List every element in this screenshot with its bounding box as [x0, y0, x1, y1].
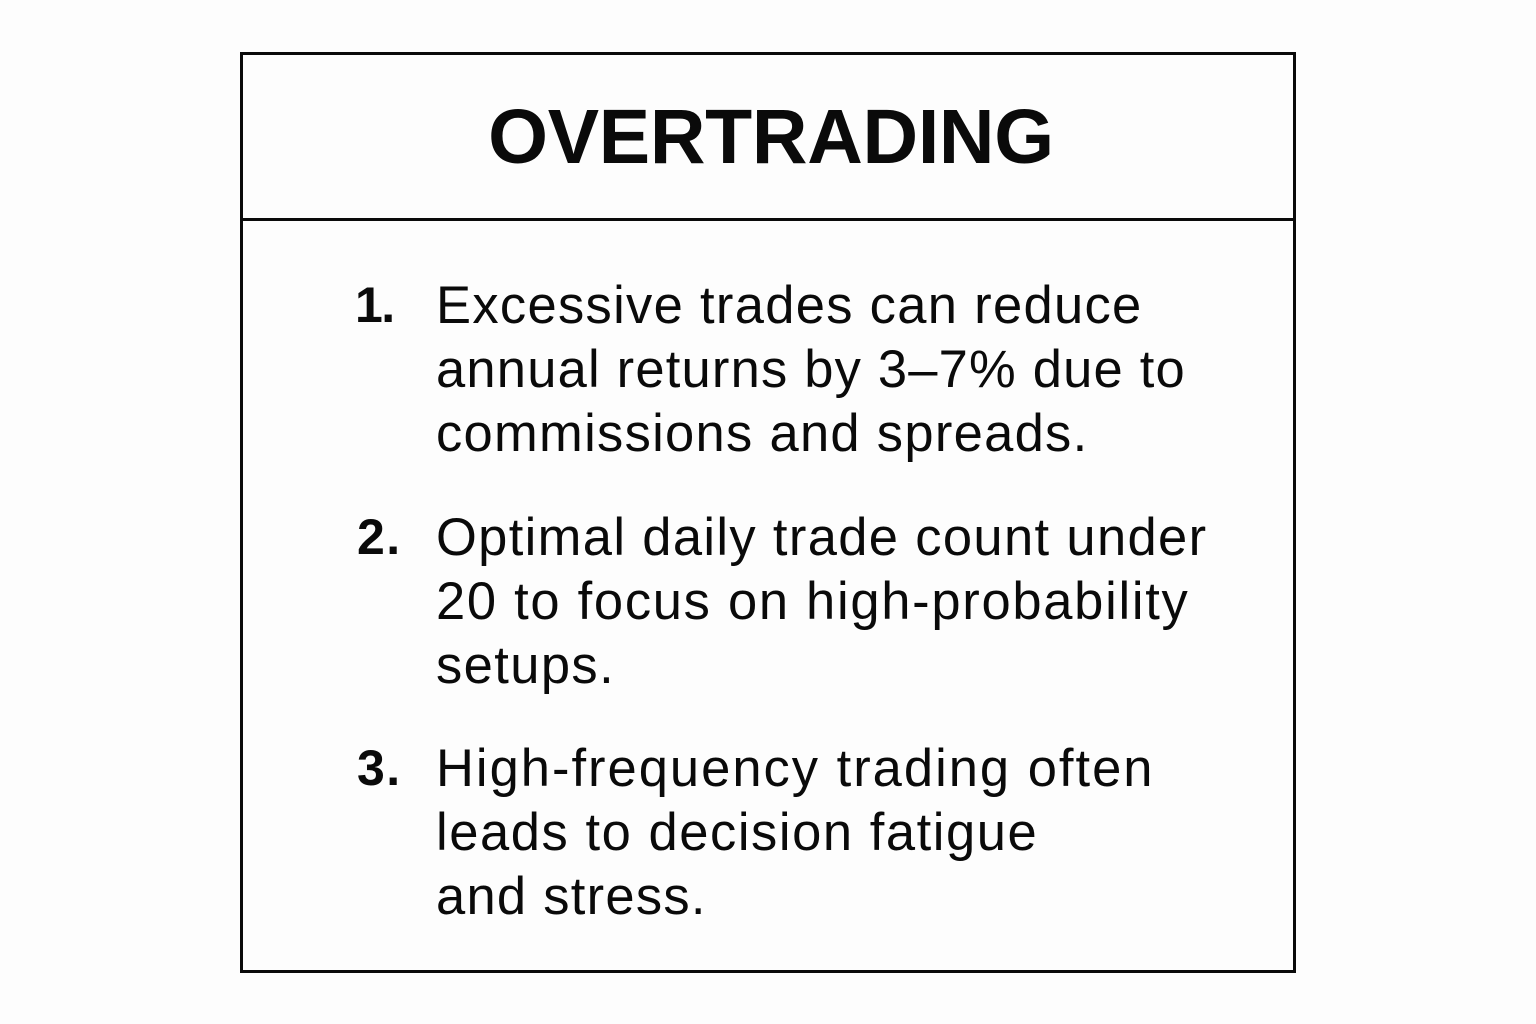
text block: point 3: High-frequency trading often — [436, 739, 1154, 798]
text block: point 3: leads to decision fatigue — [436, 803, 1038, 862]
text block: point 1 — [436, 276, 1186, 463]
text block: point 1: commissions and spreads. — [436, 404, 1088, 463]
text block: point 2: 20 to focus on high-probability — [436, 572, 1189, 631]
number 1: 1. — [355, 277, 394, 333]
text block: point 1: Excessive trades can reduce — [436, 276, 1143, 335]
number 3: 3. — [357, 740, 402, 796]
panel: overtrading card — [240, 52, 1296, 973]
title: OVERTRADING — [488, 94, 1054, 180]
text block: point 3 — [436, 739, 1154, 926]
text block: point 3: and stress. — [436, 867, 707, 926]
text block: point 1: annual returns by 3–7% due to — [436, 340, 1186, 399]
number 2: 2. — [357, 509, 402, 565]
text block: point 2: Optimal daily trade count under — [436, 508, 1207, 567]
text block: point 2: setups. — [436, 636, 615, 695]
text block: point 2 — [436, 508, 1207, 695]
title divider — [240, 218, 1296, 221]
